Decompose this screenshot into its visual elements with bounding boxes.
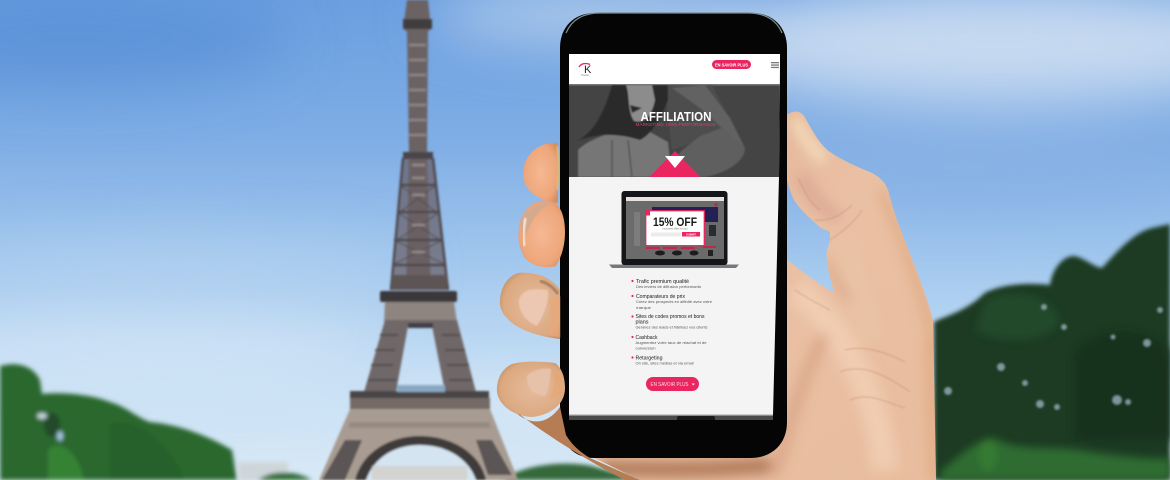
header button xyxy=(712,60,751,69)
header button: EN SAVOIR PLUS xyxy=(715,62,748,67)
item: retargeting: Retargeting xyxy=(636,355,663,361)
tower lower legs xyxy=(364,320,476,392)
item: retargeting: On site, sites médias et via email xyxy=(636,361,694,365)
call to action button: EN SAVOIR PLUS xyxy=(650,382,689,388)
item: comparateurs xyxy=(631,294,712,310)
thumb shading xyxy=(600,118,935,480)
item: comparateurs: Créez des prospects en affinité avec votre xyxy=(636,300,712,304)
phone screen xyxy=(569,54,780,421)
item: cashback xyxy=(631,335,706,351)
background buildings and centre trees xyxy=(238,462,640,480)
hero title: AFFILIATION xyxy=(640,110,712,124)
tower first platform xyxy=(350,391,489,398)
hand palm and thumb xyxy=(560,100,950,480)
tower upper lattice xyxy=(391,158,448,290)
item: trafic premium: Trafic premium qualité xyxy=(636,279,689,285)
index finger xyxy=(523,143,559,203)
popup: 15% off: exclusive offer for you xyxy=(662,226,688,230)
item: codes promos xyxy=(631,314,708,330)
fingers gripping the phone xyxy=(497,143,640,480)
item: trafic premium: Des leviers de diffusion performants xyxy=(636,285,701,289)
background trees, left xyxy=(0,364,237,480)
feature list xyxy=(631,279,712,365)
Eiffel Tower xyxy=(319,0,518,480)
middle finger xyxy=(518,200,565,267)
site header xyxy=(569,54,780,84)
item: comparateurs: marque xyxy=(636,306,651,310)
icon: K logo xyxy=(579,63,592,77)
site hero band xyxy=(569,84,780,177)
phone body xyxy=(560,13,787,458)
laptop base xyxy=(609,264,739,268)
item: comparateurs: Comparateurs de prix xyxy=(636,294,685,300)
icon: K logo: K xyxy=(584,64,592,76)
tree highlights xyxy=(944,304,1163,410)
background trees, right xyxy=(934,224,1170,480)
call to action button xyxy=(646,377,699,391)
item: codes promos: plans xyxy=(636,320,649,326)
laptop page thumbnails xyxy=(634,212,716,256)
tower spire xyxy=(403,0,431,155)
popup: 15% off: SUBMIT xyxy=(686,232,696,236)
tower base xyxy=(319,409,518,480)
little finger xyxy=(497,362,565,417)
item: codes promos: Sites de codes promos et bons xyxy=(636,314,705,320)
popup: 15% off xyxy=(645,210,704,246)
popup: 15% off: 15% OFF xyxy=(653,215,697,229)
ring finger xyxy=(500,273,560,339)
laptop lid xyxy=(622,191,728,265)
item: cashback: Augmentez votre taux de réachat et de xyxy=(636,341,706,345)
icon: hamburger menu xyxy=(771,62,779,68)
item: codes promos: Générez des leads et fidélisez vos clients xyxy=(636,326,708,330)
icon: pink triangle xyxy=(650,151,700,177)
hero subtitle: MARKETING 100% PERFORMANCE xyxy=(636,122,716,127)
item: cashback: Cashback xyxy=(636,335,658,341)
icon: K logo: Tracker xyxy=(581,74,589,77)
item: retargeting xyxy=(631,355,694,365)
smartphone xyxy=(560,13,787,458)
icon: white down arrow xyxy=(665,156,685,168)
skin creases xyxy=(795,178,910,408)
tower second platform xyxy=(380,291,457,302)
screen bottom strip xyxy=(569,414,773,420)
item: cashback: conversion xyxy=(636,347,656,351)
hero portrait xyxy=(577,85,745,177)
laptop mockup xyxy=(609,191,739,268)
heel of the hand below the phone xyxy=(508,405,640,480)
item: trafic premium xyxy=(631,279,701,289)
